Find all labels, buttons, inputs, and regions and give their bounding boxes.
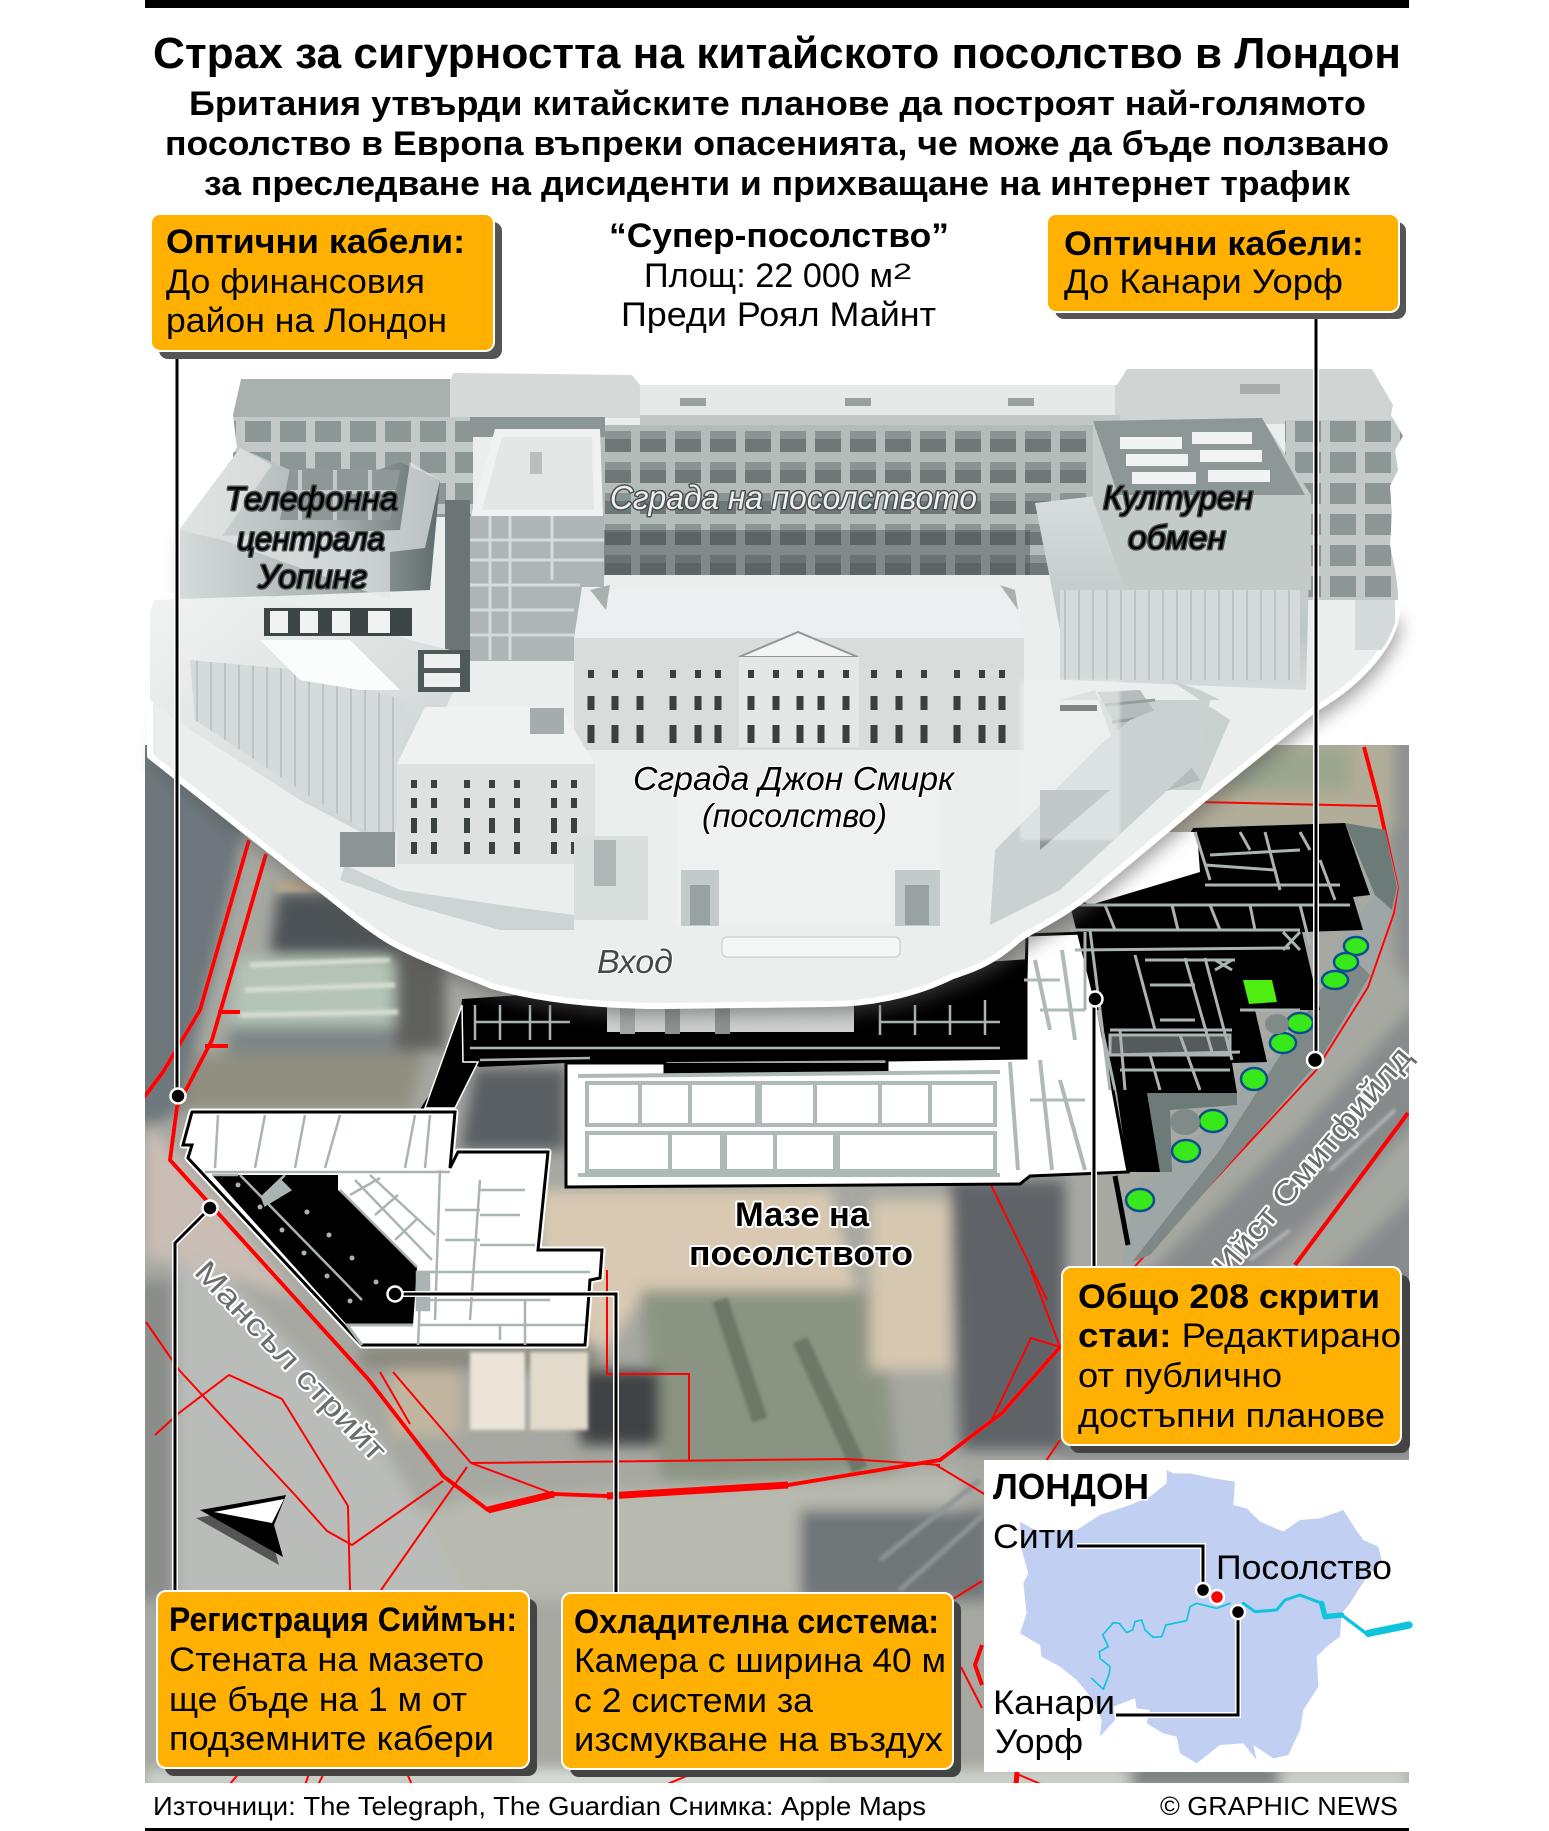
callout: fibre cables to financial district: район на Лондон [166, 302, 447, 340]
subtitle: посолство в Европа въпреки опасенията, че може да бъде ползвано [165, 125, 1389, 163]
callout: cooling system: Камера с ширина 40 м [574, 1642, 946, 1680]
label: John Smirke building [633, 760, 955, 834]
callout: fibre cables to financial district: До финансовия [166, 263, 425, 301]
subtitle: Британия утвърди китайските планове да построят най-голямото [189, 85, 1366, 123]
label: Canary Wharf [993, 1684, 1115, 1761]
River Thames [1092, 1595, 1409, 1689]
black rooms [1070, 823, 1370, 1172]
label: basement: посолството [689, 1235, 913, 1273]
subtitle [165, 85, 1389, 203]
red cable network [142, 747, 1408, 1785]
callout: fibre cables to Canary Wharf [1047, 214, 1406, 319]
locator lines and dots [1077, 1546, 1245, 1715]
callout: 208 hidden rooms: стаи: Редактирано [1078, 1317, 1401, 1355]
upper central black stripe [665, 1063, 887, 1071]
label: Embassy: Посолство [1216, 1549, 1392, 1587]
basement floor plan: west section [183, 1112, 602, 1345]
north arrow [196, 1495, 286, 1565]
label: basement [689, 1196, 913, 1273]
label: cultural exchange [1103, 479, 1253, 556]
Greater London area [1020, 1470, 1382, 1763]
central black band [422, 960, 1030, 1108]
cutaway outline [150, 365, 1403, 1006]
road label: East Smithfield: Ийст Смитфийлд [1207, 1039, 1418, 1282]
trees [1126, 937, 1368, 1211]
inset map: London [984, 1460, 1409, 1772]
callout: Seamen's Registry: Стената на мазето [169, 1641, 484, 1679]
label: telephone exchange [225, 480, 398, 595]
label: cultural exchange: Културен [1103, 479, 1253, 516]
source credit: Източници: The Telegraph, The Guardian Снимка: Apple Maps [153, 1791, 926, 1821]
label: entrance: Вход [597, 943, 673, 980]
top rule [145, 0, 1409, 8]
hidden basement rooms [212, 1175, 417, 1325]
back building [233, 369, 1405, 600]
super-embassy facts: Преди Роял Майнт [621, 296, 936, 334]
callout: fibre cables to Canary Wharf: Оптични кабели: [1064, 225, 1364, 263]
label: cultural exchange: обмен [1128, 519, 1226, 556]
callout: fibre cables to Canary Wharf: До Канари Уорф [1064, 263, 1343, 301]
callout: 208 hidden rooms [1062, 1267, 1410, 1453]
satellite map background [130, 740, 1420, 1790]
callout: 208 hidden rooms: Общо 208 скрити [1078, 1278, 1380, 1316]
title: Страх за сигурността на китайското посолство в Лондон [153, 29, 1401, 78]
callout: fibre cables to financial district: Оптични кабели: [166, 223, 465, 261]
basement floor plan: east section [1070, 823, 1398, 1267]
label: basement: Мазе на [735, 1196, 870, 1234]
cutaway drop shadow [154, 538, 1401, 1016]
callout: Seamen's Registry [157, 1591, 537, 1776]
label: John Smirke building: Сграда Джон Смирк [633, 760, 955, 797]
super-embassy facts: 2 [893, 259, 912, 284]
super-embassy facts: Площ: 22 000 м [644, 257, 893, 295]
basement floor plan: central section [385, 933, 1128, 1187]
bright green block [1243, 980, 1277, 1004]
subtitle: за преследване на дисиденти и прихващане на интернет трафик [204, 165, 1351, 203]
label: John Smirke building: (посолство) [702, 797, 887, 834]
label: telephone exchange: Уопинг [257, 558, 367, 595]
bottom rule [145, 1828, 1409, 1831]
callout: cooling system [562, 1593, 961, 1777]
callout: Seamen's Registry: подземните кабери [169, 1720, 494, 1758]
callout: 208 hidden rooms: от публично [1078, 1357, 1282, 1395]
callout: cooling system: с 2 системи за [574, 1682, 813, 1720]
central John Smirke building [574, 585, 1024, 750]
leader lines and anchor dots [170, 319, 1323, 1593]
callout: Seamen's Registry: Регистрация Сиймън: [169, 1601, 517, 1639]
callout: cooling system: Охладителна система: [574, 1603, 939, 1641]
telephone exchange [179, 448, 440, 600]
super-embassy facts: “Супер-посолство” [609, 217, 949, 255]
front corner building [397, 707, 595, 864]
callout: fibre cables to financial district [151, 214, 502, 359]
forecourt and perimeter wall [340, 679, 1210, 958]
callout: cooling system: изсмукване на въздух [574, 1721, 943, 1759]
tower [445, 429, 604, 661]
copyright: © GRAPHIC NEWS [1160, 1791, 1398, 1821]
label: City: Сити [993, 1518, 1075, 1556]
label: telephone exchange: централа [237, 520, 385, 557]
callout: 208 hidden rooms: достъпни планове [1078, 1397, 1385, 1435]
title: London: ЛОНДОН [993, 1466, 1149, 1507]
callout: Seamen's Registry: ще бъде на 1 м от [169, 1681, 467, 1719]
label: telephone exchange: Телефонна [225, 480, 398, 517]
label: embassy building: Сграда на посолството [610, 479, 977, 516]
embassy 3D model cutaway [150, 365, 1405, 1016]
super-embassy facts [609, 217, 949, 334]
road label: Mansell Street: Мансъл стрийт [188, 1254, 394, 1468]
label: Canary Wharf: Уорф [995, 1723, 1083, 1761]
culture block [1035, 418, 1395, 795]
landscaped strip [1122, 823, 1398, 1267]
front wing [150, 596, 470, 850]
label: Canary Wharf: Канари [993, 1684, 1115, 1722]
central white plan [566, 933, 1128, 1187]
